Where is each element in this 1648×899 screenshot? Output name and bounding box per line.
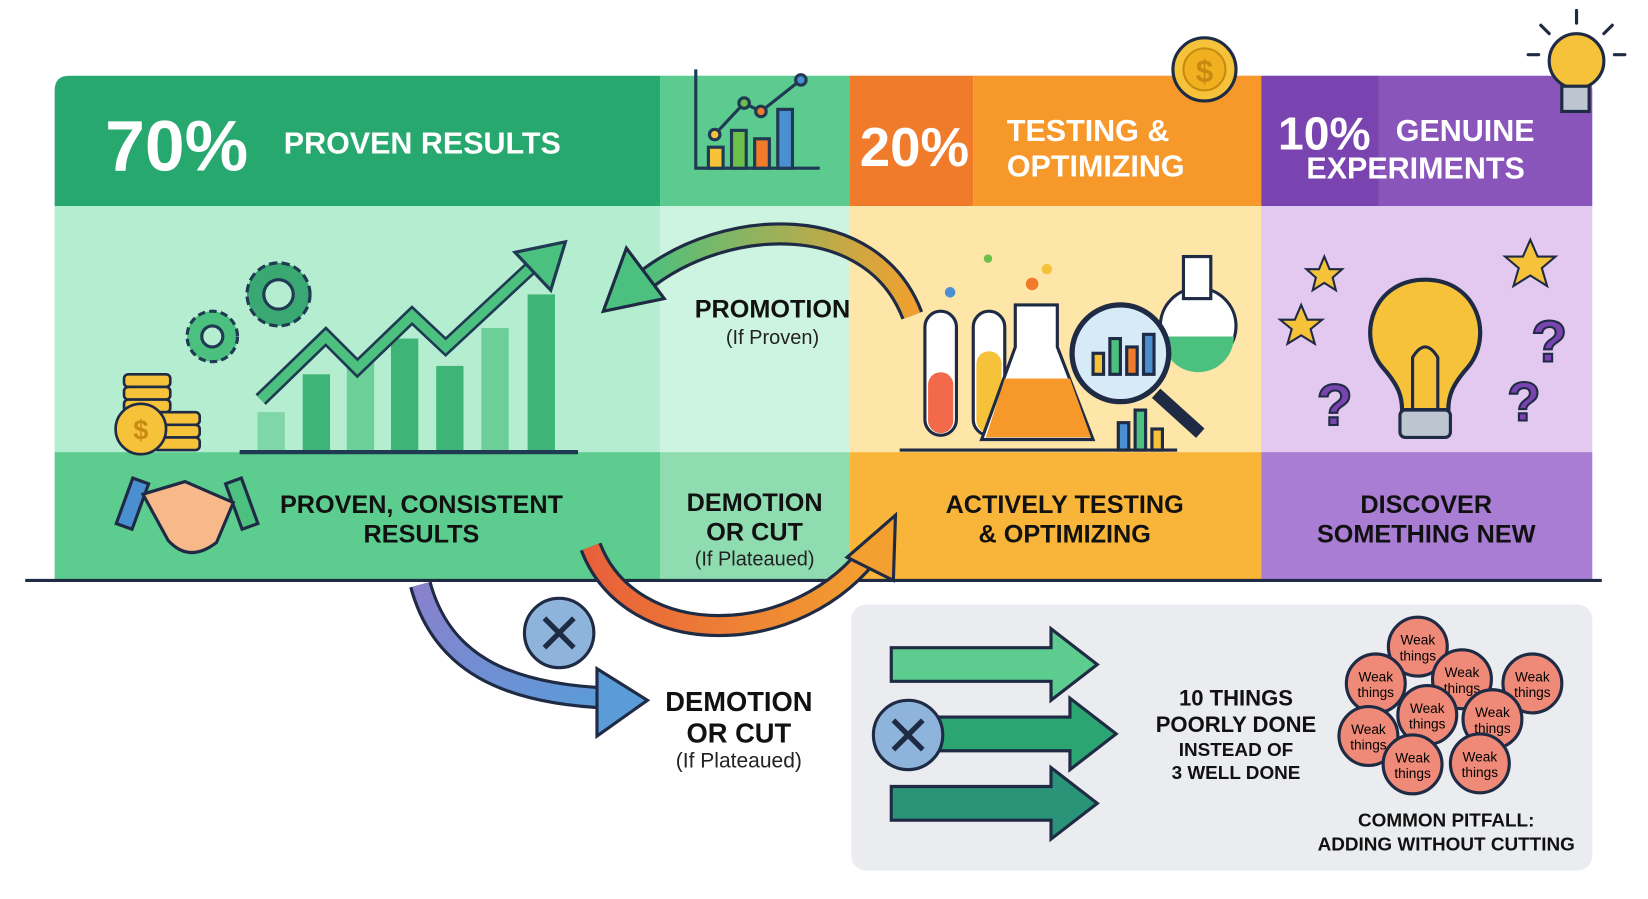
header: 20% testing: TESTING &	[1007, 114, 1169, 148]
text: discover something new	[1317, 491, 1536, 549]
text: 10 things: POORLY DONE	[1156, 712, 1316, 737]
icon: handshake	[116, 478, 258, 553]
illustration: growth chart with gears and coins: $	[133, 415, 148, 446]
text: promotion: (If Proven)	[726, 327, 819, 349]
text: actively testing: ACTIVELY TESTING	[946, 491, 1184, 519]
bubbles: weak things: things	[1358, 685, 1394, 700]
bubbles: weak things	[1339, 617, 1562, 794]
bubbles: weak things: things	[1400, 648, 1436, 663]
text: discover something new: SOMETHING NEW	[1317, 521, 1536, 549]
bubbles: weak things: things	[1444, 681, 1480, 696]
icon: lightbulb top	[1528, 11, 1625, 111]
middle band	[55, 206, 660, 452]
text: 10 things: INSTEAD OF	[1179, 740, 1293, 761]
bubbles: weak things: things	[1394, 766, 1431, 781]
text: common pitfall	[1318, 810, 1575, 856]
arrow: demotion orange	[591, 515, 895, 626]
text: 10 things	[1156, 686, 1316, 784]
header: 70% proven results	[55, 76, 849, 206]
bubbles: weak things: Weak	[1410, 701, 1445, 716]
arrows	[891, 629, 1116, 839]
text: demotion in table: DEMOTION	[687, 489, 823, 517]
header: 20% testing: OPTIMIZING	[1007, 150, 1185, 184]
bubbles: weak things: things	[1409, 717, 1446, 732]
header: 10% experiments: EXPERIMENTS	[1306, 152, 1525, 186]
text: actively testing: & OPTIMIZING	[979, 521, 1151, 549]
bubbles: weak things: Weak	[1395, 750, 1430, 765]
text: actively testing	[946, 491, 1184, 549]
text: proven consistent results: PROVEN, CONSISTENT	[280, 491, 564, 519]
bubbles: weak things: things	[1474, 721, 1511, 736]
bubbles: weak things: Weak	[1400, 633, 1435, 648]
icon: small bar chart	[696, 69, 820, 168]
header: 70% proven results: 70%	[105, 106, 248, 186]
bubbles: weak things: Weak	[1351, 722, 1386, 737]
illustration: lightbulb with stars and question marks	[1280, 240, 1567, 438]
icon: x circle	[524, 598, 594, 668]
header: 70% proven results: PROVEN RESULTS	[284, 127, 561, 161]
illustration: lightbulb with stars and question marks: ?	[1507, 372, 1541, 433]
text: proven consistent results: RESULTS	[364, 521, 479, 549]
icon: x	[873, 700, 943, 770]
text: 10 things: 10 THINGS	[1179, 686, 1293, 711]
header: 10% experiments: 10%	[1278, 107, 1371, 159]
text: promotion: PROMOTION	[695, 296, 850, 324]
text: discover something new: DISCOVER	[1360, 491, 1492, 519]
illustration: lightbulb with stars and question marks: ?	[1531, 310, 1567, 375]
text: demotion in table: (If Plateaued)	[695, 549, 815, 571]
text: demotion in table	[687, 489, 823, 571]
header: 20% testing	[849, 76, 1261, 206]
text: demotion or cut	[665, 686, 812, 773]
bubbles: weak things: things	[1350, 738, 1387, 753]
bubbles: weak things: Weak	[1515, 669, 1550, 684]
arrow: promotion	[603, 234, 912, 315]
baseline	[25, 579, 1624, 582]
text: proven consistent results	[280, 491, 564, 549]
panel: common pitfall	[851, 605, 1592, 871]
icon: dollar coin top: $	[1196, 53, 1214, 89]
bubbles: weak things: Weak	[1463, 749, 1497, 764]
text: demotion in table: OR CUT	[706, 518, 804, 546]
text: demotion or cut: DEMOTION	[665, 686, 812, 717]
illustration: growth chart with gears and coins	[116, 242, 578, 454]
illustration: lab equipment	[900, 254, 1236, 450]
bubbles: weak things: Weak	[1475, 705, 1510, 720]
bubbles: weak things: things	[1462, 765, 1498, 780]
bubbles: weak things: Weak	[1445, 665, 1479, 680]
bubbles: weak things: Weak	[1358, 669, 1393, 684]
bubbles: weak things: things	[1514, 685, 1551, 700]
text: common pitfall: ADDING WITHOUT CUTTING	[1318, 835, 1575, 856]
icon: dollar coin top	[1173, 38, 1236, 101]
illustration: lightbulb with stars and question marks: ?	[1317, 373, 1353, 438]
text: 10 things: 3 WELL DONE	[1172, 763, 1300, 784]
panel: main table	[55, 76, 1592, 580]
arrow: demotion blue	[420, 585, 647, 736]
text: promotion	[695, 296, 850, 349]
bottom band	[55, 452, 660, 580]
header: 10% experiments: GENUINE	[1396, 114, 1535, 148]
header: 20% testing: 20%	[860, 117, 969, 178]
header: 10% experiments	[1261, 76, 1592, 206]
text: demotion or cut: (If Plateaued)	[676, 750, 802, 773]
text: common pitfall: COMMON PITFALL:	[1358, 810, 1534, 831]
text: demotion or cut: OR CUT	[687, 717, 792, 748]
